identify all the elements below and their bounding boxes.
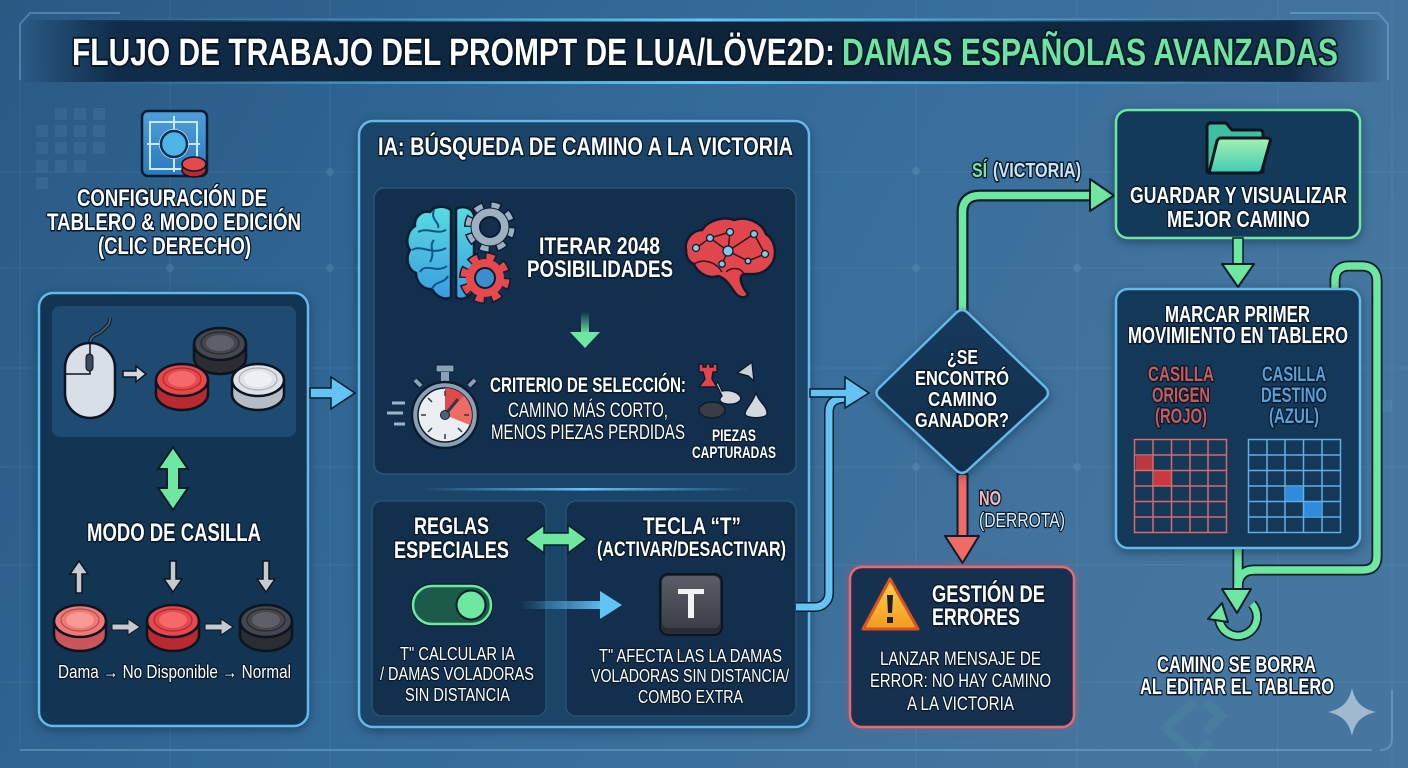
- text: decision question: GANADOR?: [915, 410, 1009, 432]
- label: captured pieces: CAPTURADAS: [692, 443, 776, 462]
- text: error message: LANZAR MENSAJE DE: [880, 649, 1041, 670]
- heading: mark move: [1128, 301, 1348, 348]
- warning mark: [887, 595, 893, 623]
- heading: mark move: MARCAR PRIMER: [1165, 301, 1310, 327]
- arrow: up: [70, 561, 88, 593]
- arrow: down center: [164, 561, 182, 592]
- arrow: toggle to key: [520, 591, 622, 619]
- icon: red gear: [465, 258, 505, 298]
- icon: stopwatch: [387, 365, 478, 448]
- label: captured pieces: [692, 426, 776, 462]
- text: save: [1130, 182, 1347, 232]
- text: selection criteria: CAMINO MÁS CORTO,: [508, 399, 668, 422]
- text: iterate: ITERAR 2048: [539, 233, 660, 260]
- text: selection criteria: MENOS PIEZAS PERDIDAS: [491, 421, 685, 444]
- label: yes: [972, 159, 1081, 182]
- text: decision question: [915, 347, 1009, 432]
- text: iterate: [527, 233, 673, 283]
- text: T effect: T" AFECTA LAS LA DAMAS: [599, 646, 782, 666]
- text: path erased: AL EDITAR EL TABLERO: [1140, 674, 1334, 699]
- text: decision question: ENCONTRÓ: [915, 366, 1009, 390]
- text: error message: A LA VICTORIA: [907, 694, 1014, 715]
- icon: folder: [1207, 123, 1270, 173]
- text: T effect: [591, 646, 789, 707]
- heading: board setup: [47, 184, 301, 260]
- heading: special rules: REGLAS: [414, 513, 489, 540]
- text: decision question: CAMINO: [928, 389, 997, 411]
- heading: square mode: MODO DE CASILLA: [87, 519, 261, 547]
- text: T effect: COMBO EXTRA: [638, 687, 743, 707]
- label: captured pieces: PIEZAS: [712, 426, 756, 445]
- panel: mouse and pieces: [52, 306, 296, 437]
- heading: special rules: [394, 513, 509, 564]
- label: no: NO: [979, 488, 1001, 510]
- text: selection criteria: [490, 373, 686, 444]
- icon: board configuration: [142, 111, 207, 177]
- heading: errors: GESTIÓN DE: [932, 580, 1045, 608]
- icon: T key: [660, 574, 722, 635]
- arrow: yes to save: [962, 179, 1114, 312]
- title: FLUJO DE TRABAJO DEL PROMPT DE LUA/LÖVE2D:: [72, 31, 835, 74]
- arrow: into reset loop: [1222, 589, 1251, 613]
- label: destination: [1261, 363, 1327, 428]
- text: path erased: [1140, 652, 1334, 699]
- arrow: loop back: [1238, 266, 1377, 596]
- label: destination: CASILLA: [1262, 363, 1326, 386]
- text: iterate: POSIBILIDADES: [527, 256, 673, 283]
- chart: blue board: [1248, 440, 1340, 532]
- icon: warning: [863, 579, 918, 629]
- arrow: green double between rules and key: [525, 525, 587, 553]
- title banner: [22, 18, 1386, 84]
- icon: captured pieces: [699, 362, 767, 418]
- icon: stacked pieces: [156, 328, 284, 410]
- heading: errors: [932, 580, 1045, 631]
- icon: reset loop: [1208, 589, 1257, 636]
- panel: mark first move: [1116, 289, 1360, 548]
- label: no: (DERROTA): [979, 510, 1065, 532]
- text: path erased: CAMINO SE BORRA: [1157, 652, 1316, 677]
- arrow: down right: [257, 561, 275, 592]
- label: origin: (ROJO): [1155, 405, 1207, 428]
- icon: normal piece: [240, 605, 292, 651]
- text: calculate AI: [380, 644, 534, 705]
- label: origin: CASILLA: [1148, 363, 1214, 386]
- label: yes: (VICTORIA): [993, 160, 1081, 182]
- panel: iterate and criteria: [374, 188, 796, 474]
- text: decision question: ¿SE: [947, 347, 978, 369]
- text: save: MEJOR CAMINO: [1167, 206, 1310, 232]
- arrow: vertical double green: [158, 447, 188, 510]
- heading: board setup: CONFIGURACIÓN DE: [77, 184, 267, 212]
- panel: special rules: [372, 501, 546, 716]
- heading: board setup: TABLERO & MODO EDICIÓN: [47, 208, 301, 236]
- icon: cyan brain with gears: [407, 207, 510, 299]
- text: selection criteria: CRITERIO DE SELECCIÓN:: [490, 373, 686, 397]
- text: calculate AI: / DAMAS VOLADORAS: [380, 664, 534, 684]
- heading: special rules: ESPECIALES: [394, 537, 509, 564]
- label: no: [979, 488, 1065, 532]
- icon: sparkle: [1328, 688, 1376, 736]
- panel: error handling: [850, 567, 1074, 727]
- arrow: fading green down: [570, 312, 600, 348]
- icon: toggle: [413, 586, 491, 624]
- label: origin: [1148, 363, 1214, 428]
- chart: red board: [1134, 440, 1226, 532]
- panel: AI path search: [359, 121, 809, 727]
- arrow: left to AI panel: [310, 377, 355, 409]
- arrow: piece to piece: [112, 619, 140, 635]
- label: yes: SÍ: [972, 159, 987, 182]
- icon: red network brain: [686, 218, 775, 297]
- arrow: piece to piece two: [205, 619, 233, 635]
- icon: unavailable piece: [147, 605, 199, 651]
- label: destination: DESTINO: [1261, 384, 1327, 407]
- icon: queen piece: [54, 605, 106, 651]
- label: destination: (AZUL): [1269, 405, 1319, 428]
- icon: mouse: [65, 318, 115, 418]
- decision diamond: [876, 310, 1048, 473]
- watermark: logo: [1166, 701, 1221, 756]
- heading: T key: (ACTIVAR/DESACTIVAR): [597, 538, 786, 561]
- text: calculate AI: T" CALCULAR IA: [400, 644, 515, 664]
- arrow: mouse to pieces: [123, 366, 146, 382]
- panel: board editor: [39, 293, 308, 726]
- text: save: GUARDAR Y VISUALIZAR: [1130, 182, 1347, 208]
- heading: AI: IA: BÚSQUEDA DE CAMINO A LA VICTORIA: [378, 131, 793, 161]
- text: error message: ERROR: NO HAY CAMINO: [870, 671, 1051, 692]
- heading: T key: TECLA “T”: [643, 513, 741, 540]
- text: T effect: VOLADORAS SIN DISTANCIA/: [591, 666, 789, 686]
- arrow: no to error: [945, 474, 979, 563]
- text: error message: [870, 649, 1051, 715]
- label: origin: ORIGEN: [1152, 384, 1210, 407]
- arrow: save to mark: [1222, 238, 1254, 287]
- heading: T key: [597, 513, 786, 561]
- label: mode sequence: Dama → No Disponible → Normal: [58, 662, 291, 682]
- panel: T key: [566, 501, 796, 716]
- heading: errors: ERRORES: [932, 604, 1020, 631]
- text: calculate AI: SIN DISTANCIA: [405, 685, 510, 705]
- panel: save and visualize: [1116, 110, 1360, 238]
- arrow: AI panel to decision: [796, 377, 869, 607]
- icon: grey gear: [470, 207, 510, 247]
- heading: board setup: (CLIC DERECHO): [98, 233, 251, 260]
